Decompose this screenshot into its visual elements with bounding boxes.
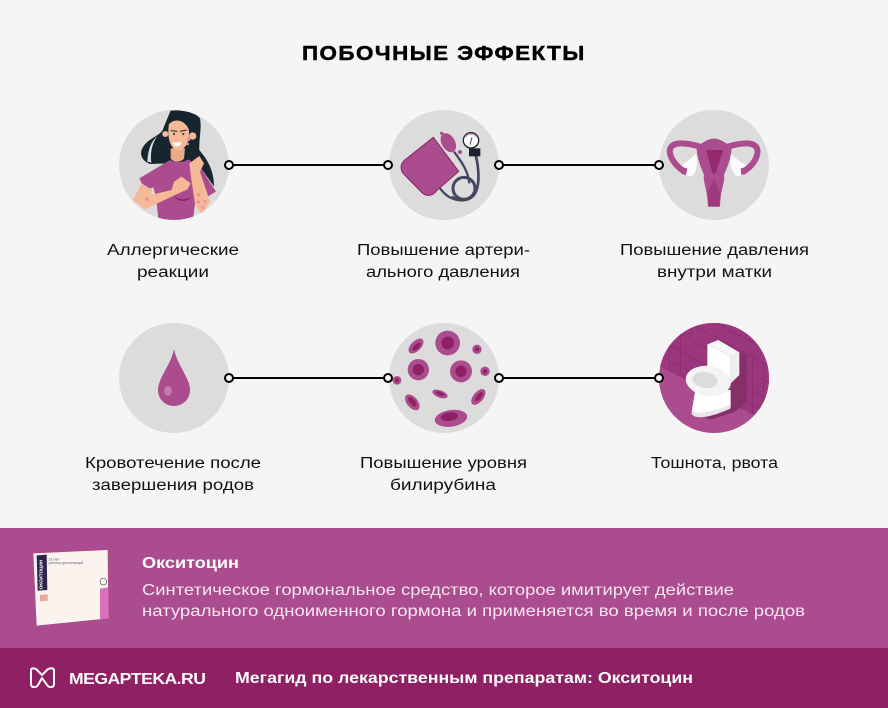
icon: medicine box: раствор для инъекций [49, 561, 83, 565]
label: blood pressure: ального давления [366, 264, 520, 281]
label: bilirubin: билирубина [390, 477, 496, 494]
label: uterine pressure: Повышение давления [620, 242, 809, 259]
description text: натурального одноименного гормона и применяется во время и после родов [142, 603, 805, 620]
label: allergic reactions: Аллергические [107, 242, 239, 259]
icon: uterus [659, 110, 769, 220]
icon: blood cells [389, 323, 499, 433]
label: bilirubin [360, 455, 527, 494]
panel: oxytocin description [0, 528, 888, 648]
connector: row 2 right [495, 374, 663, 382]
title: ПОБОЧНЫЕ ЭФФЕКТЫ [302, 43, 584, 65]
brand name: MEGAPTEKA.RU [69, 670, 206, 688]
footer caption: Мегагид по лекарственным препаратам: Окситоцин [235, 670, 693, 687]
description text [142, 582, 805, 620]
icon: medicine box: 2х1 мл [49, 558, 59, 562]
connector: row 2 left [225, 374, 392, 382]
connector: row 1 left [225, 161, 392, 169]
icon: toilet [659, 323, 769, 433]
icon: medicine box: ОКСИТОЦИН [39, 559, 44, 589]
icon: blood pressure cuff [389, 110, 499, 220]
label: uterine pressure [620, 242, 809, 281]
label: blood pressure: Повышение артери- [357, 242, 530, 259]
label: allergic reactions [107, 242, 239, 281]
label: bilirubin: Повышение уровня [360, 455, 527, 472]
heading: oxytocin: Окситоцин [142, 555, 239, 572]
label: blood pressure [357, 242, 530, 281]
label: postpartum bleeding [85, 455, 261, 494]
label: postpartum bleeding: завершения родов [92, 477, 254, 494]
icon: woman with allergic rash [119, 110, 229, 221]
icon: Megapteka logo [31, 668, 54, 687]
footer band [0, 648, 888, 708]
icon: medicine box [33, 550, 108, 626]
description text: Синтетическое гормональное средство, которое имитирует действие [142, 582, 734, 599]
label: nausea: Тошнота, рвота [651, 455, 778, 472]
label: allergic reactions: реакции [137, 264, 209, 281]
label: uterine pressure: внутри матки [657, 264, 772, 281]
label: postpartum bleeding: Кровотечение после [85, 455, 261, 472]
icon: blood drop [119, 323, 229, 433]
connector: row 1 right [495, 161, 663, 169]
